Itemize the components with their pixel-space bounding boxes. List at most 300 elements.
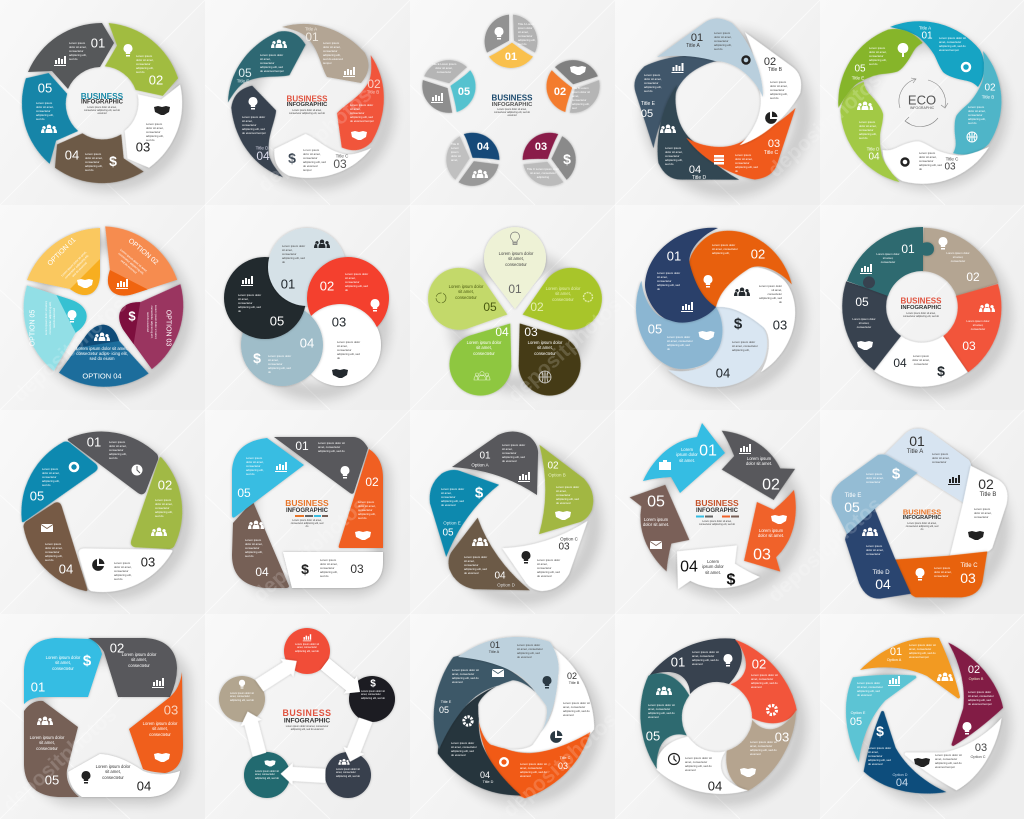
arrow 04: 04 <box>680 558 698 576</box>
segment 03 <box>101 71 209 175</box>
segment 01 <box>860 638 960 698</box>
icon: people <box>271 40 287 48</box>
segment 05: Lorem ipsum dolor sit amet, consectetur adipiscing elit, sed do <box>246 456 264 476</box>
watermark: depositphotos <box>499 708 621 819</box>
segment 01 <box>645 228 718 323</box>
segment 05 <box>833 17 925 127</box>
segment 05 <box>224 257 306 339</box>
segment 05 <box>412 464 499 566</box>
panel: pinwheel with titles <box>211 19 400 201</box>
segment 04: 04 <box>494 570 506 582</box>
segment 03: Lorem ipsum dolor sit amet, consectetur adipiscing elit, sed do <box>320 558 338 578</box>
segment 02 <box>513 434 600 535</box>
heading: Lorem ipsum dolor sit amet, consectetur adipiscing elit, sed do eiusmod <box>84 106 120 115</box>
icon: bulb <box>543 676 551 688</box>
icon: handshake <box>77 279 93 288</box>
segment 05: 05 <box>237 486 251 500</box>
arrow 01 <box>643 423 725 493</box>
segment 05: Lorem ipsum dolor sit amet, consectetur adipiscing elit, sed do <box>644 73 662 93</box>
segment 02: 02 <box>764 56 776 68</box>
icon: people <box>862 528 878 536</box>
segment 01 <box>282 24 368 83</box>
panel: aperture wheel <box>828 633 1021 818</box>
segment 03 <box>686 76 818 201</box>
segment 03: 03 <box>558 542 570 552</box>
arrow 05 <box>611 476 703 575</box>
segment 04 <box>9 493 119 597</box>
segment 01: Lorem ipsum dolor sit amet, consectetur adipiscing elit, sed do <box>109 440 127 460</box>
segment 02: 02 <box>365 475 379 489</box>
icon: dollar: $ <box>734 316 743 332</box>
node 02: Lorem ipsum dolor sit amet, consectetur adipiscing elit, sed do <box>361 690 385 700</box>
node 05: Lorem ipsum dolor sit amet, consectetur adipiscing elit, sed do <box>230 692 254 702</box>
segment 01 <box>452 431 538 495</box>
segment 03: Title C <box>560 756 571 760</box>
icon: bulb <box>341 466 349 478</box>
panel: pastel pentagon <box>822 428 1023 624</box>
petal 02 <box>513 260 610 344</box>
icon: list <box>714 155 724 164</box>
segment 05 <box>617 35 724 161</box>
segment 05: 05 <box>641 108 653 120</box>
segment 04: Lorem ipsum dolor sit amet, consectetur adipiscing elit, sed do <box>245 538 263 558</box>
icon: bulb <box>724 654 732 666</box>
segment 03: Lorem ipsum dolor sit amet, consectetur adipiscing elit, sed do eiusmod tempor <box>303 148 326 172</box>
segment 05: Option E <box>851 711 866 715</box>
segment 05: Title E <box>641 101 656 107</box>
panel: spiral wheel <box>619 215 820 413</box>
node 05 <box>219 676 265 722</box>
panel: dark swirl <box>420 637 602 812</box>
icon: chart <box>152 678 164 688</box>
segment 02: Lorem ipsum dolor sit amet, consectetur adipiscing elit, sed do eiusmod <box>751 673 778 689</box>
icon: dollar: $ <box>563 151 571 167</box>
heading: Lorem ipsum dolor sit amet, consectetur adipiscing elit, sed do <box>699 520 735 526</box>
heading <box>903 508 941 534</box>
segment 02: 02 <box>966 270 980 284</box>
panel: rounded square pinwheel <box>24 638 183 797</box>
circle 02: Title B Lorem ipsum dolor sit amet, consectetur adipiscing elit, sed <box>572 86 590 110</box>
circle 05 <box>415 53 482 120</box>
segment 01: 01 <box>901 242 915 256</box>
segment 02: 02 <box>968 664 980 676</box>
labels: 05: Lorem ipsum dolor sit amet, consectetur adipiscing elit, sed do <box>238 293 261 313</box>
segment 03 <box>501 498 608 600</box>
icon: handshake <box>351 131 367 140</box>
segment 04: Lorem ipsum dolor sit amet, consectetur adipiscing elit, sed do eiusmod <box>451 741 477 757</box>
circle 01: 01 <box>505 51 517 63</box>
watermark: depositphotos <box>504 293 626 407</box>
segment 02: Option B <box>969 677 984 681</box>
segment 03: 03 <box>350 562 364 576</box>
watermark: depositphotos <box>764 68 886 182</box>
icon: bulb <box>249 97 257 110</box>
segment 03 <box>889 513 1003 624</box>
icon: bulb <box>522 551 530 564</box>
circle 03: 03 <box>535 141 547 153</box>
arrow 02: 02 <box>762 476 780 494</box>
segment 01: Lorem ipsum dolor sit amet, consectetur adipiscing elit, sed do eiusmod tempor <box>939 36 966 52</box>
segment 04: Lorem ipsum dolor sit amet, consectetur adipiscing elit, sed do eiusmod tempor <box>242 115 266 135</box>
panel: flower petals <box>420 227 610 408</box>
segment 03 <box>283 552 383 588</box>
icon: bulb <box>511 232 519 244</box>
labels: 03 <box>332 314 361 378</box>
segment 02: Lorem ipsum dolor sit amet, consectetur adipiscing elit, sed do <box>770 80 788 100</box>
icon: chart <box>518 472 530 482</box>
segment 04 <box>45 107 154 211</box>
node 04: Lorem ipsum dolor sit amet, consectetur adipiscing elit, sed do <box>255 770 279 780</box>
segment 05: 05 <box>854 64 866 74</box>
segment 02: 02 <box>158 478 172 492</box>
labels: 05 <box>238 276 284 328</box>
icon: bulb <box>239 680 245 689</box>
segment 04: 04 <box>137 778 151 794</box>
segment 01 <box>27 228 100 295</box>
heading: Lorem ipsum dolor sit amet, consectetur adipiscing elit, sed do eiusmod <box>494 108 530 117</box>
segment 02: 02 <box>567 671 577 681</box>
segment 03: Lorem ipsum dolor sit amet, consectetur adipiscing elit, sed do eiusmod <box>750 740 777 756</box>
icon: donut <box>742 56 750 64</box>
segment 01: Lorem ipsum dolor sit amet, consectetur adipiscing elit, sed do eiusmod tempor <box>909 643 936 659</box>
segment 01: Lorem ipsum dolor sit amet, consectetur adipiscing elit, sed do <box>69 41 87 61</box>
watermark: depositphotos <box>764 493 886 607</box>
segment 01 <box>649 638 742 694</box>
segment 02: Title B <box>982 94 994 100</box>
segment 03 <box>112 272 211 369</box>
segment 02: 02 <box>110 640 124 656</box>
segment 01: 01 <box>31 680 45 694</box>
segment 03: 03 <box>768 138 780 150</box>
icon: pie <box>765 112 778 124</box>
arrow 03 <box>721 480 828 585</box>
labels: 01 <box>281 240 330 292</box>
circle 01: Title A Lorem ipsum dolor sit amet, consectetur adipiscing elit, sed do <box>518 22 536 46</box>
segment 04: Title D <box>867 146 880 152</box>
segment 01: Option A <box>887 658 902 662</box>
segment 05: 05 <box>439 705 449 715</box>
segment 04: 04 <box>480 770 490 780</box>
segment 04: Option D <box>497 582 516 588</box>
segment 05: Lorem ipsum dolor sit amet, consectetur adipiscing elit, sed do eiusmod tempor <box>260 53 284 73</box>
segment 05: Lorem ipsum dolor sit amet, consectetur adipiscing elit, sed do eiusmod <box>44 301 56 335</box>
segment 01: 01 <box>890 646 902 658</box>
segment 05 <box>828 657 917 771</box>
segment 02: Lorem ipsum dolor sit amet, consectetur adipiscing elit, sed do <box>155 498 173 518</box>
icon: people <box>37 716 53 725</box>
icon: people <box>472 170 488 178</box>
segment 01 <box>890 21 984 87</box>
segment 01: Title A <box>907 449 923 455</box>
circle 02: 02 <box>554 86 566 98</box>
heading: INFOGRAPHIC <box>284 718 330 724</box>
segment 01: Lorem ipsum dolor sit amet, consectetur <box>932 452 950 464</box>
icon: people <box>656 686 672 695</box>
icon: handshake <box>154 106 170 115</box>
heading <box>81 91 124 120</box>
segment 03 <box>919 272 1024 379</box>
segment 03 <box>904 695 1021 803</box>
segment 05: Lorem ipsum dolor sit amet, consectetur adipiscing elit, sed do eiusmod <box>857 681 883 697</box>
icon: bulb <box>68 310 76 322</box>
icon: donut <box>500 758 508 766</box>
icon: people <box>151 528 167 536</box>
arrow 03: 03 <box>753 546 771 564</box>
segment 03: Title C <box>336 154 349 158</box>
panel: overlapping circles <box>224 228 389 392</box>
icon: dollar: $ <box>288 150 296 166</box>
segment 05: 05 <box>45 772 59 788</box>
heading <box>492 94 533 120</box>
segment 03: Lorem ipsum dolor sit amet, consectetur adipiscing elit, sed do eiusmod tempor <box>935 753 962 769</box>
segment 02 <box>108 455 196 560</box>
segment 03: 03 <box>944 162 956 172</box>
segment 01: Title A <box>305 26 317 32</box>
segment 02: Lorem ipsum dolor sit amet, consectetur adipiscing elit, sed do <box>968 105 986 125</box>
panel: pentagon swirl <box>617 18 818 211</box>
segment 04 <box>825 504 939 615</box>
segment 05: Title E <box>441 700 452 704</box>
segment 05 <box>3 67 92 169</box>
petal 02: Lorem ipsum dolor sit amet, consectetur <box>546 286 580 302</box>
segment 04: 04 <box>59 562 73 576</box>
segment 01 <box>884 428 971 503</box>
segment 04: 04 <box>875 576 891 592</box>
icon: handshake <box>154 753 170 762</box>
segment 02: Title B <box>367 90 379 94</box>
icon: chart <box>343 67 355 77</box>
segment 03: OPTION 03 <box>164 310 172 346</box>
icon: bulb <box>704 275 712 288</box>
segment 02 <box>921 633 1010 746</box>
segment 01: Lorem ipsum dolor sit amet, consectetur adipiscing elit, sed do eiusmod <box>692 650 719 666</box>
segment 01: 01 <box>490 640 500 650</box>
segment 04: 04 <box>256 149 270 163</box>
segment 03: Lorem ipsum dolor sit amet, consectetur adipiscing elit, sed do eiusmod <box>146 305 158 339</box>
icon: people <box>338 759 350 765</box>
icon: pie <box>550 730 562 743</box>
icon: dollar: $ <box>83 652 92 670</box>
puzzle knob 05 <box>861 275 877 290</box>
segment 01 <box>24 638 102 704</box>
segment 01 <box>28 23 114 89</box>
panel: eco swirl <box>820 17 1018 207</box>
segment 05: 05 <box>850 716 862 728</box>
icon: handshake <box>857 341 873 350</box>
segment 01: 01 <box>909 433 925 449</box>
segment 01 <box>657 18 763 97</box>
segment 05: Lorem ipsum dolor sit amet, consectetur adipiscing elit, sed do eiusmod <box>441 487 464 507</box>
heading <box>285 498 329 530</box>
segment 03: Lorem ipsum dolor sit amet, consectetur adipiscing elit, sed do <box>759 284 782 304</box>
icon: donut <box>902 158 908 166</box>
labels: 02 <box>320 272 379 312</box>
segment 02 <box>481 640 602 765</box>
segment 02: Option B <box>548 472 566 478</box>
segment 01: Lorem ipsum dolor sit amet, consectetur adipiscing elit, sed do eiusmod <box>517 643 543 659</box>
icon: chart <box>681 302 693 312</box>
icon: handshake <box>914 758 930 767</box>
labels: 01: 01 <box>281 276 295 292</box>
icon: dollar: $ <box>370 678 376 690</box>
icon: people <box>660 124 676 133</box>
icon: gear <box>768 706 776 714</box>
icon: clock <box>132 464 142 476</box>
icon: dollar: $ <box>253 350 261 366</box>
circle 03 <box>512 122 586 197</box>
segment 04 <box>631 85 763 211</box>
eco cycle heading: INFOGRAPHIC <box>910 106 935 110</box>
segment 04: 04 <box>689 164 701 176</box>
panel: arrow ring <box>611 413 828 624</box>
labels: 02: 02 <box>320 278 334 294</box>
segment 02: Title B <box>980 492 996 498</box>
icon: dollar: $ <box>109 153 117 169</box>
icon: handshake <box>771 515 787 524</box>
segment 04 <box>241 304 323 386</box>
segment 05: 05 <box>30 488 44 504</box>
segment 05 <box>822 443 920 549</box>
segment 03: 03 <box>773 318 787 332</box>
segment 03: Option C <box>971 755 986 759</box>
segment 04 <box>846 710 963 818</box>
segment 04 <box>651 721 758 819</box>
watermark: depositphotos <box>9 293 131 407</box>
icon: chart <box>241 276 253 286</box>
heading: BUSINESS <box>81 91 124 101</box>
icon: dollar: $ <box>128 308 136 324</box>
heading: Lorem ipsum dolor sit amet, consectetur adipiscing elit, sed do <box>289 108 325 115</box>
segment 05 <box>15 434 103 539</box>
segment 01: 01 <box>479 450 491 462</box>
icon: bulb <box>495 27 503 40</box>
segment 05: Title E <box>845 493 861 499</box>
segment 03 <box>299 304 381 386</box>
icon: handshake <box>740 768 756 777</box>
heading <box>901 296 942 324</box>
segment 01: Lorem ipsum dolor sit amet, consectetur adipiscing elit, sed do <box>318 441 345 453</box>
segment 01 <box>268 228 346 306</box>
watermark: depositphotos <box>254 83 376 197</box>
arrow 02 <box>710 413 802 512</box>
icon: chart <box>860 264 872 274</box>
segment 01: OPTION 01 <box>47 237 77 267</box>
heading <box>695 498 739 532</box>
heading: Lorem ipsum dolor sit amet, consectetur adipiscing elit, sed do <box>906 522 938 531</box>
segment 04: Title D <box>256 146 269 150</box>
segment 04: Lorem ipsum dolor sit amet, consectetur <box>866 544 884 556</box>
icon: dollar: $ <box>301 561 309 577</box>
icon: people <box>857 102 873 110</box>
segment 03: 03 <box>333 157 347 171</box>
segment 03 <box>705 253 820 372</box>
eco cycle heading <box>899 78 948 127</box>
segment 05: 05 <box>442 528 454 538</box>
node 01 <box>284 628 330 674</box>
icon: handshake <box>555 511 571 520</box>
panel: ring of arrow segments <box>3 8 209 211</box>
petal 05: 05 <box>483 300 497 314</box>
icon: bulb <box>124 44 132 56</box>
icon: mail <box>650 541 662 549</box>
segment 05: Lorem ipsum dolor sit amet, consectetur adipiscing elit, sed do <box>42 467 60 487</box>
segment 01: 01 <box>295 439 309 453</box>
segment 04: Lorem ipsum dolor sit amet, consectetur <box>96 764 130 780</box>
segment 04 <box>668 293 783 413</box>
segment 04: Lorem ipsum dolor sit amet, consectetur adipiscing elit, sed do eiusmod <box>685 756 712 772</box>
segment 04: 04 <box>708 778 722 794</box>
segment 05 <box>225 19 308 120</box>
heading <box>287 94 328 120</box>
segment 02: Title B <box>768 67 783 73</box>
segment 01: Title A <box>489 650 500 654</box>
icon: chart <box>431 93 443 103</box>
segment 01: 01 <box>671 654 685 670</box>
arrow 04 <box>659 519 767 624</box>
segment 03: 03 <box>962 339 976 353</box>
segment 05: Title E <box>852 76 864 80</box>
segment 05: OPTION 05 <box>30 310 36 346</box>
icon: bulb <box>916 568 924 580</box>
heading: BUSINESS <box>283 708 331 718</box>
segment 01: Lorem ipsum dolor sit amet, consectetur adipiscing elit, sed do eiusmod tempor <box>323 41 343 65</box>
watermark: depositphotos <box>249 493 371 607</box>
heading: INFOGRAPHIC <box>901 305 942 311</box>
icon: chart <box>888 676 900 686</box>
segment 04: 04 <box>255 565 269 579</box>
segment 04: 04 <box>893 356 907 370</box>
segment 02: 02 <box>751 246 765 262</box>
node 03 <box>325 752 371 798</box>
segment 05: Lorem ipsum dolor sit amet, consectetur adipiscing elit, sed do <box>869 46 887 66</box>
segment 03: Lorem ipsum dolor sit amet, consectetur <box>934 566 952 578</box>
icon: people <box>248 520 264 529</box>
icon: people <box>41 124 57 133</box>
segment 01: Lorem ipsum dolor sit amet, consectetur adipiscing elit, sed do eiusmod <box>502 443 525 463</box>
segment 04: 04 <box>716 366 730 380</box>
segment 01 <box>68 432 158 494</box>
segment 03: 03 <box>558 761 568 771</box>
segment 05: 05 <box>38 80 52 96</box>
node 01: Lorem ipsum dolor sit amet, consectetur adipiscing elit, sed do <box>295 643 319 653</box>
circle 03: Title C Lorem ipsum dolor sit amet, consectetur adipiscing <box>527 167 559 179</box>
petal 02: 02 <box>530 300 544 314</box>
segment 04 <box>232 502 289 588</box>
segment 02 <box>91 210 177 300</box>
segment 05: Lorem ipsum dolor sit amet, consectetur adipiscing elit, sed do eiusmod <box>452 668 479 684</box>
circle 02 <box>540 53 607 120</box>
segment 05: Lorem ipsum dolor sit amet, consectetur adipiscing elit, sed do eiusmod <box>648 703 675 719</box>
segment 04: 04 <box>868 152 880 162</box>
segment 04 <box>439 517 546 619</box>
arrow 01: 01 <box>699 442 717 460</box>
segment 04: Lorem ipsum dolor sit amet, consectetur adipiscing elit, sed do <box>665 146 683 166</box>
segment 03: 03 <box>164 702 178 718</box>
panel: rounded square blades <box>232 437 383 588</box>
segment 02: Title B <box>569 681 580 685</box>
labels: 01: Lorem ipsum dolor sit amet, consectetur adipiscing elit, sed do <box>282 244 305 264</box>
heading: INFOGRAPHIC <box>286 508 329 514</box>
heading: Lorem ipsum dolor sit amet, consectetur adipiscing elit, sed do eiusmod <box>286 725 328 731</box>
icon: pie <box>92 558 104 571</box>
segment 04: Lorem ipsum dolor sit amet, consectetur adipiscing elit, sed do <box>45 542 63 562</box>
segment 03: 03 <box>975 742 987 754</box>
segment 04: 04 <box>896 777 908 789</box>
arrow 02 to 03 <box>336 714 382 762</box>
petal 01: 01 <box>508 282 522 296</box>
panel: rounded pentagon blades <box>412 431 608 619</box>
icon: mail <box>492 669 504 677</box>
